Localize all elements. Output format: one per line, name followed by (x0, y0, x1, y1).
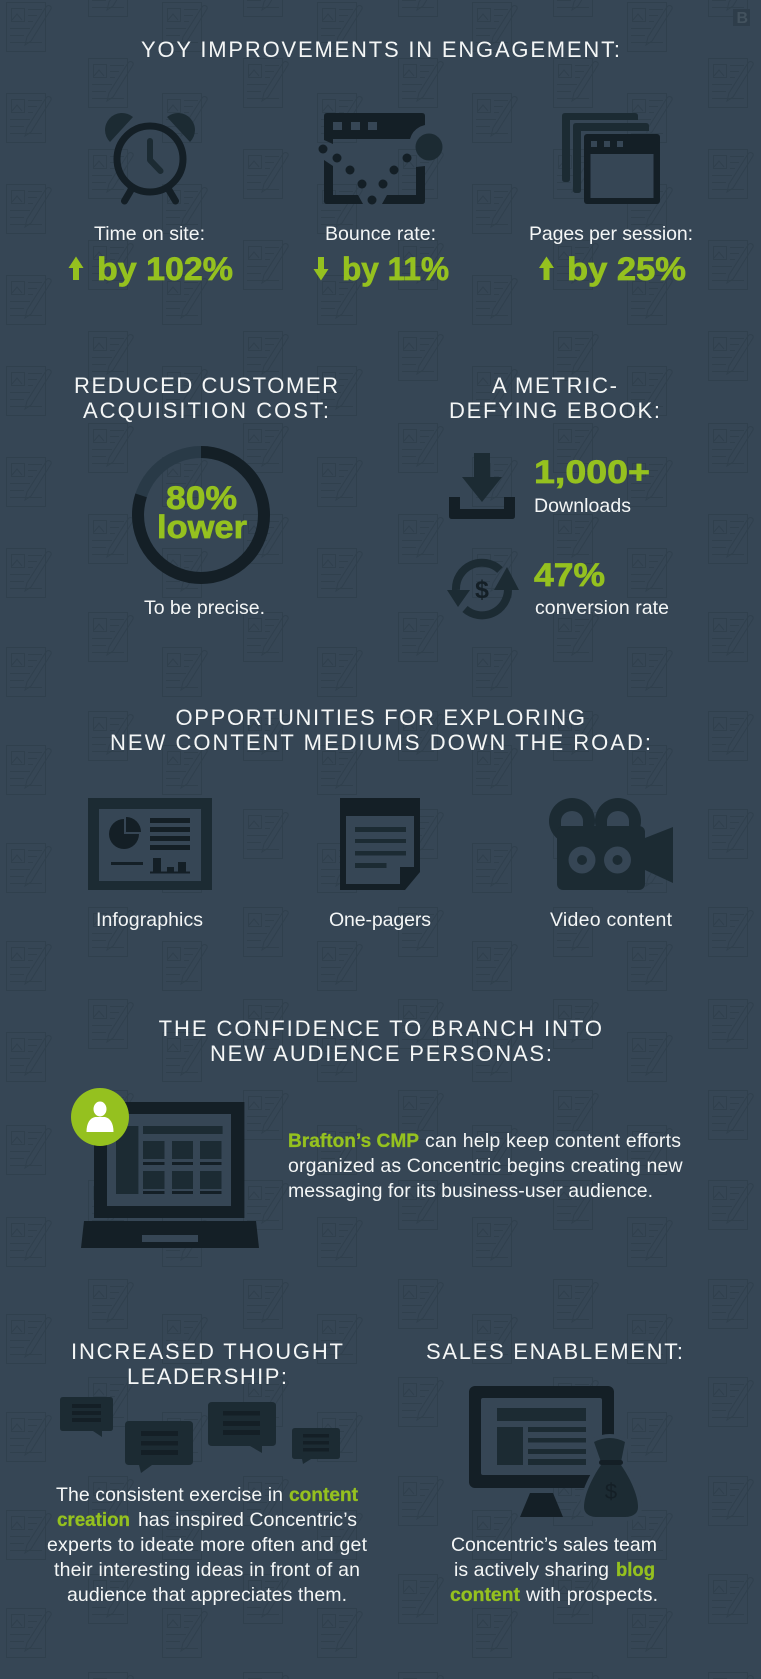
stat: by 102%: by 102% (97, 251, 233, 287)
panel: increased thought leadership (47, 1339, 368, 1606)
stat: 1,000+: 1,000+ (534, 454, 650, 490)
text: video content: Video content (550, 909, 673, 931)
heading: reduced customer acquisition cost (74, 373, 338, 423)
text: thought leadership paragraph: experts to ideate more often and get (47, 1534, 368, 1556)
text: Brafton's CMP description: organized as Concentric begins creating new (288, 1155, 684, 1177)
panel: YOY improvements in engagement (68, 37, 693, 287)
heading: new content mediums: NEW CONTENT MEDIUMS DOWN THE ROAD: (110, 730, 651, 755)
text: conversion rate: conversion rate (535, 597, 669, 619)
heading: new audience personas: THE CONFIDENCE TO BRANCH INTO (159, 1016, 602, 1041)
panel: sales enablement (426, 1339, 683, 1606)
heading: increased thought leadership: LEADERSHIP: (127, 1364, 287, 1389)
icon: money bag: $ (605, 1479, 617, 1504)
heading: increased thought leadership: INCREASED THOUGHT (71, 1339, 343, 1364)
icon: laptop with dashboard (81, 1102, 259, 1248)
panel: metric-defying ebook (447, 373, 669, 619)
donut chart: 80 percent (138, 452, 264, 578)
text: to be precise: To be precise. (144, 597, 265, 619)
text: bounce rate: Bounce rate: (325, 223, 436, 245)
icon: download tray (449, 453, 515, 519)
heading: new content mediums (110, 705, 651, 755)
text: thought leadership paragraph: creation (57, 1509, 130, 1531)
icon: dollar conversion cycle (447, 563, 519, 615)
text: sales enablement paragraph: content (450, 1584, 520, 1606)
text: Brafton's CMP description: Brafton’s CMP (288, 1130, 419, 1152)
stat: 80% lower: 80% (166, 480, 237, 516)
text: thought leadership paragraph: audience that appreciates them. (67, 1584, 347, 1606)
heading: new audience personas: NEW AUDIENCE PERSONAS: (210, 1041, 552, 1066)
panel: new audience personas (71, 1016, 684, 1248)
stat: 80% lower (157, 480, 247, 545)
icon: money bag (584, 1438, 638, 1517)
panel: reduced customer acquisition cost (74, 373, 338, 619)
stat: by 25%: by 25% (567, 251, 686, 287)
heading: metric-defying ebook: DEFYING EBOOK: (449, 398, 660, 423)
icon: alarm clock (105, 113, 195, 201)
heading: metric-defying ebook (449, 373, 660, 423)
heading: new content mediums: OPPORTUNITIES FOR EXPLORING (176, 705, 585, 730)
text: sales enablement paragraph: is actively sharing (454, 1559, 609, 1581)
logo badge (733, 9, 750, 27)
logo badge: B (736, 10, 748, 27)
heading: increased thought leadership (71, 1339, 343, 1389)
text: Brafton's CMP description (288, 1130, 684, 1202)
icon: up arrow (68, 256, 84, 280)
icon: speech bubbles (60, 1397, 340, 1473)
heading: sales enablement: SALES ENABLEMENT: (426, 1339, 683, 1364)
heading: YOY improvements: YOY IMPROVEMENTS IN ENGAGEMENT: (141, 37, 620, 62)
stat: by 11%: by 11% (342, 251, 449, 287)
text: thought leadership paragraph (47, 1484, 368, 1606)
icon: down arrow (314, 257, 328, 280)
icon: up arrow (539, 256, 554, 280)
panel: new content mediums (88, 705, 673, 931)
icon: bounce window (318, 113, 442, 204)
icon: infographic board (88, 798, 212, 890)
text: thought leadership paragraph: their interesting ideas in front of an (54, 1559, 360, 1581)
text: sales enablement paragraph: with prospects. (525, 1584, 658, 1606)
text: Brafton's CMP description: messaging for its business-user audience. (288, 1180, 653, 1202)
icon: monitor with article (469, 1386, 614, 1517)
icon: video camera (549, 798, 673, 890)
text: thought leadership paragraph: content (289, 1484, 358, 1506)
heading: reduced customer acquisition cost: REDUCED CUSTOMER (74, 373, 338, 398)
stat: 80% lower: lower (157, 509, 247, 545)
heading: reduced customer acquisition cost: ACQUISITION COST: (83, 398, 329, 423)
text: thought leadership paragraph: has inspired Concentric’s (138, 1509, 357, 1531)
text: pages per session: Pages per session: (529, 223, 693, 245)
text: one-pagers: One-pagers (329, 909, 431, 931)
text: sales enablement paragraph (450, 1534, 658, 1606)
text: thought leadership paragraph: The consistent exercise in (56, 1484, 283, 1506)
text: sales enablement paragraph: Concentric’s sales team (451, 1534, 657, 1556)
icon: dollar conversion cycle: $ (475, 576, 489, 604)
text: sales enablement paragraph: blog (616, 1559, 655, 1581)
heading: metric-defying ebook: A METRIC- (492, 373, 617, 398)
text: infographics: Infographics (96, 909, 203, 931)
icon: stacked browser windows (562, 113, 660, 204)
text: downloads: Downloads (534, 495, 631, 517)
icon: user badge (71, 1088, 129, 1146)
stat: 47%: 47% (534, 557, 605, 593)
icon: one-pager document (340, 798, 420, 890)
text: time on site: Time on site: (94, 223, 205, 245)
heading: new audience personas (159, 1016, 602, 1066)
text: Brafton's CMP description: can help keep content efforts (425, 1130, 681, 1152)
